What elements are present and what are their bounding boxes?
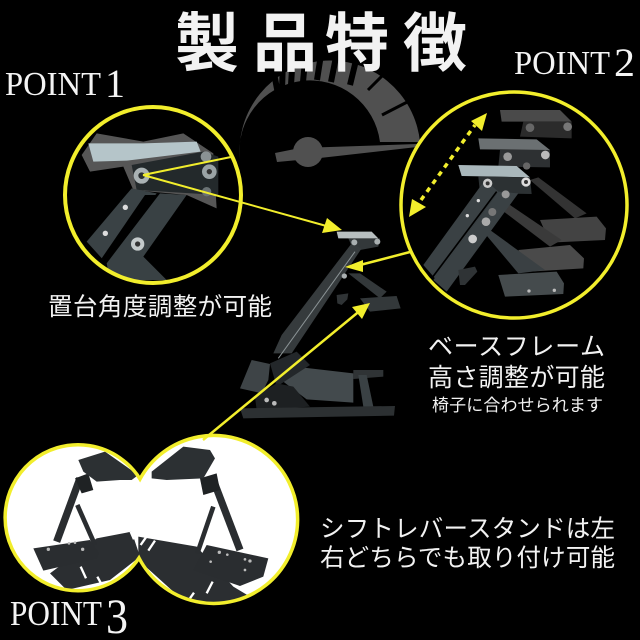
heading: point 2: POINT [514,45,610,82]
top pads [78,452,138,482]
text: point 2 caption [428,333,605,415]
text: point 3 caption: シフトレバースタンドは左 [320,515,615,543]
icon: double-headed dashed arrow [409,113,487,217]
heading: point 1 [5,61,125,106]
speedometer gauge [239,47,420,167]
pedal base [240,360,270,393]
text: point 3 caption [320,515,615,572]
title: 特 [325,8,389,80]
arrow: point 1 to tray [143,157,342,233]
arrow: point 2 to frame [345,252,410,272]
heading: point 2: 2 [614,40,635,85]
title: 徴 [403,8,467,80]
heading: point 1: 1 [105,61,125,106]
title: 品 [253,8,317,80]
panel: point 1 tray angle close-up [65,107,241,283]
slots and holes [81,532,213,598]
text: point 2 caption: ベースフレーム [428,333,605,361]
middle ghost position [478,138,584,272]
lower pads [33,540,99,571]
heading: point 3: POINT [10,594,102,633]
panel: point 2 base frame height close-up [401,92,627,318]
product photo: wheel stand [240,232,401,418]
uprights [57,478,240,553]
top ghost position [500,110,606,243]
text: point 1 caption: 置台角度調整が可能 [48,293,272,321]
text: point 3 caption: 右どちらでも取り付け可能 [320,544,615,572]
heading: point 2 [514,40,635,85]
panel: point 3 shift lever stand close-up [5,435,298,607]
text: point 2 caption: 椅子に合わせられます [432,396,603,415]
large base plates [50,532,140,590]
title: 製 [175,8,239,80]
heading: point 1: POINT [5,66,101,103]
text: point 2 caption: 高さ調整が可能 [428,364,605,392]
heading: point 3 [10,588,128,640]
arrow: point 3 to lever stand [203,303,370,440]
title [175,8,467,80]
lowest solid position [458,165,530,177]
